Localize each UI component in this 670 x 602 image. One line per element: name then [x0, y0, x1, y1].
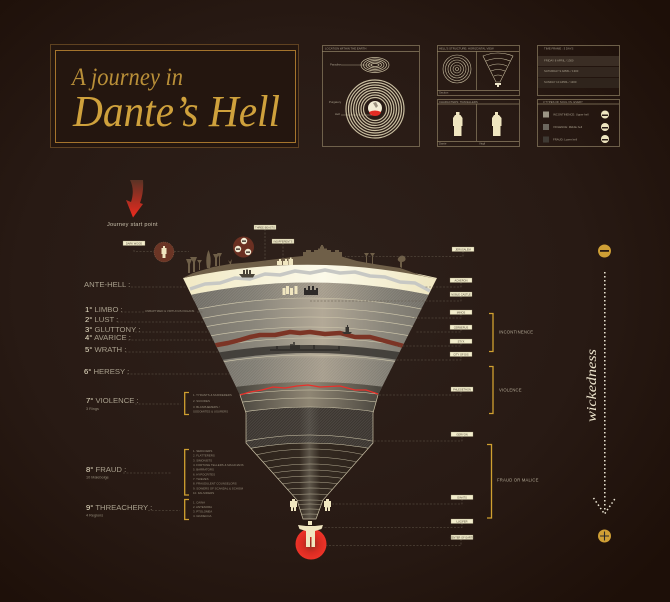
river phlegethon red [240, 385, 378, 395]
bracket: fraud or malice [487, 444, 539, 518]
panel: location within the earth: Purgatory [329, 100, 342, 104]
bracket and list: malebolge: 9. SOWERS OF SCANDAL & SCHISM [193, 486, 244, 490]
text: wickedness: wickedness [585, 348, 600, 422]
bracket and list: malebolge: 7. THIEVES [193, 477, 209, 481]
panel: hell's structure [437, 46, 520, 96]
dotted arrow [604, 272, 606, 510]
panel: types of soul: INCONTINENCE: Upper hell [553, 112, 589, 116]
bracket and list: malebolge: 3. SIMONISTS [193, 458, 212, 462]
title: Dante's Hell: Dante’s Hell [72, 87, 280, 136]
left labels [84, 280, 244, 520]
bracket and list: cocytus: 1. CAINA [193, 500, 205, 504]
bracket and list: malebolge: 8. FRAUDULENT COUNSELORS [193, 482, 237, 486]
giants [290, 499, 331, 511]
panel: time frame: FRIDAY 8 APRIL / 1300 [544, 58, 574, 62]
arrow: journey start [126, 180, 143, 218]
place tags and leader lines: LUCIFER [456, 519, 468, 523]
violence band [236, 382, 382, 412]
place tags and leader lines: NOBLE CASTLE [451, 292, 471, 296]
bracket and list: violence rings: 2. SUICIDES [193, 399, 210, 403]
cone outline lower [240, 395, 378, 519]
label: ante-hell: ANTE-HELL : [84, 280, 130, 289]
place tags and leader lines: CITY OF DIS [453, 352, 469, 356]
place tags and leader lines: CERBERUS [454, 325, 468, 329]
bracket and list: malebolge: 6. HYPOCRITES [193, 472, 215, 476]
ground surface [183, 256, 437, 279]
place tags and leader lines: THREE BEASTS [255, 225, 275, 229]
hatched band below dis [226, 358, 394, 386]
panel: time frame [538, 46, 620, 96]
place tags and leader lines: GIANTS [457, 495, 467, 499]
dante start figure [134, 242, 189, 262]
bracket and list: violence rings: 1. TYRANTS & MURDERERS [193, 393, 232, 397]
panel: dante and virgil figures: Virgil [479, 142, 486, 146]
phlegyas boat [342, 325, 352, 334]
panel: dante and virgil figures: Dante [439, 142, 447, 146]
place tags and leader lines: INDIFFERENTS [274, 239, 293, 243]
place tags and leader lines [123, 225, 474, 546]
bracket and list: malebolge [185, 449, 244, 495]
limbo hatched band [191, 282, 428, 330]
panel: dante and virgil figures [437, 100, 520, 146]
label: gluttony: 3° GLUTTONY : [85, 325, 140, 334]
bracket and list: malebolge: 1. SEDUCERS [193, 449, 212, 453]
panel: time frame: TIME FRAME : 3 DAYS [544, 46, 573, 50]
bracket and list: violence rings: SODOMITES & USURERS [193, 410, 228, 414]
label: violence: 7° VIOLENCE : [86, 396, 139, 405]
bracket and list: malebolge: 5. BARRATORS [193, 468, 214, 472]
purgatory island rings [361, 58, 389, 72]
label: lust: 2° LUST : [85, 315, 118, 324]
river acheron [190, 270, 430, 291]
bracket and list: violence rings: 3. BLASPHEMERS / [193, 405, 220, 409]
left labels: UNBAPTIZED & VIRTUOUS PAGANS [145, 309, 194, 313]
bracket and list: cocytus [185, 500, 212, 520]
hell plan rings [443, 55, 471, 83]
label: limbo: 1° LIMBO : [85, 305, 123, 314]
panel: location within the earth: Hell [335, 112, 340, 116]
label: fraud: 8° FRAUD : [86, 465, 126, 474]
panel: time frame: SATURDAY 9 APRIL / 1300 [544, 69, 579, 73]
panel: types of soul: VIOLENCE: Middle hell [553, 125, 582, 129]
panel: location within the earth: LOCATION WITHIN THE EARTH [325, 46, 366, 50]
bracket: violence: VIOLENCE [499, 388, 522, 392]
text: journey start point: Journey start point [107, 222, 158, 228]
earth rings [346, 80, 404, 138]
bracket and list: malebolge: 10. FALSIFIERS [193, 491, 214, 495]
bracket: violence [489, 366, 522, 414]
hell cone mini [483, 53, 513, 87]
bracket: incontinence [489, 314, 533, 352]
icon: plus [598, 530, 611, 542]
place tags and leader lines: PHLEGETHON [453, 387, 471, 391]
place tags and leader lines: GERYON [456, 432, 468, 436]
label: heresy: 6° HERESY : [84, 367, 129, 376]
panel: types of soul [537, 100, 620, 146]
label: avarice: 4° AVARICE : [85, 333, 131, 342]
bracket and list: violence rings [185, 392, 232, 414]
bracket and list: cocytus: 3. PTOLOMEA [193, 510, 212, 514]
place tags and leader lines: CENTER OF EARTH [450, 535, 474, 539]
bracket and list: malebolge: 4. FORTUNE TELLERS & MAGICIANS [193, 463, 244, 467]
river styx brown [205, 332, 415, 349]
souls at gate [277, 258, 293, 265]
panel: types of soul: 3 TYPES OF SOUL VS. EVERY [543, 100, 583, 104]
label: treachery: 9° THREACHERY : [86, 503, 152, 512]
bracket and list: malebolge: 2. FLATTERERS [193, 454, 215, 458]
rings [198, 298, 422, 448]
place tags and leader lines: JERUSALEM [455, 247, 471, 251]
dark heresy band [220, 345, 400, 360]
panel: hell's structure: HELL'S STRUCTURE: HORIZONTAL VIEW [439, 46, 494, 50]
charon boat [239, 270, 255, 278]
left labels: 4 Regions [86, 514, 103, 518]
city of dis [270, 342, 340, 351]
left labels: 3 Rings [86, 407, 99, 411]
panel: dante and virgil figures: CHARACTERS: TRAVELLERS [439, 100, 478, 104]
figure: Virgil [492, 112, 502, 136]
bracket and list: cocytus: 4. GIUDECCA [193, 514, 212, 518]
hatched dark band [248, 407, 370, 448]
three beasts [233, 236, 254, 258]
title: A journey in: A journey in [70, 64, 183, 91]
left labels: 10 Malebolge [86, 476, 109, 480]
panel: types of soul: FRAUD: Lower hell [553, 138, 577, 142]
panel: location within the earth: Paradise [330, 62, 341, 66]
bracket and list: cocytus: 2. ANTENORA [193, 505, 212, 509]
panel: location within the earth [322, 46, 420, 146]
limbo souls [282, 286, 298, 295]
bracket: incontinence: INCONTINENCE [499, 330, 533, 334]
place tags and leader lines: ACHERON [455, 278, 468, 282]
label: wrath: 5° WRATH : [85, 345, 126, 354]
place tags and leader lines: STYX [458, 339, 465, 343]
bracket: fraud or malice: FRAUD OR MALICE [497, 478, 539, 482]
figure: Dante [453, 112, 462, 136]
title panel [50, 44, 298, 148]
icon: minus [598, 244, 611, 258]
cone of hell [183, 264, 437, 519]
panel: time frame: SUNDAY 10 APRIL / 1300 [544, 80, 577, 84]
malebolge [252, 444, 368, 519]
wickedness scale [585, 244, 616, 542]
trees [186, 250, 406, 273]
panel: hell's structure: Section [439, 90, 449, 94]
noble castle [304, 286, 318, 295]
cocytus red circle [296, 528, 326, 560]
lucifer [298, 521, 323, 547]
city of jerusalem [303, 245, 342, 257]
place tags and leader lines: MINOS [457, 310, 466, 314]
place tags and leader lines: DARK WOOD [126, 241, 142, 245]
